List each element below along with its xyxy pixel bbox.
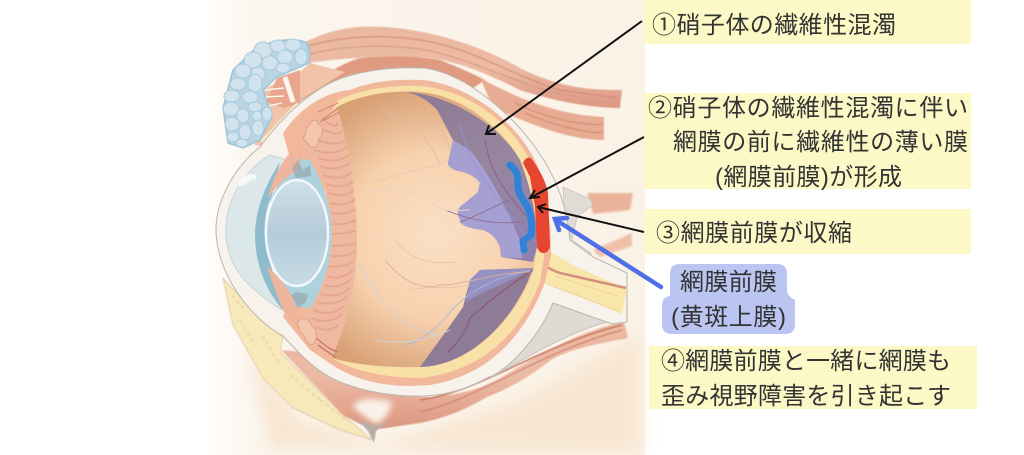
panel: step 1 bbox=[644, 0, 971, 44]
arrow: step 1 to vitreous bbox=[486, 21, 642, 134]
lacrimal gland tendon bbox=[262, 70, 300, 142]
optic nerve bbox=[527, 250, 627, 314]
text: step 2: 網膜の前に繊維性の薄い膜 bbox=[673, 129, 968, 156]
posterior chamber bbox=[270, 158, 332, 308]
retinal yellow layer bbox=[322, 86, 544, 378]
text: step 3: ③網膜前膜が収縮 bbox=[656, 220, 852, 247]
grey orbital fat pads bbox=[490, 303, 607, 378]
contraction red layer bbox=[523, 158, 550, 253]
vitreous opacity upper region bbox=[407, 92, 537, 262]
text: step 4: ④網膜前膜と一緒に網膜も bbox=[661, 348, 951, 375]
ciliary process lower bbox=[297, 319, 316, 345]
panel: step 4 bbox=[649, 346, 977, 410]
inferior eyelid muscle bbox=[281, 322, 628, 443]
posterior muscle stubs bbox=[587, 193, 633, 214]
label: epiretinal membrane bbox=[662, 264, 795, 334]
iris upper bbox=[268, 146, 311, 198]
cornea bbox=[226, 155, 288, 310]
anterior chamber bbox=[255, 162, 283, 310]
lower orbital fat bbox=[223, 278, 372, 440]
ora serrata stripes bbox=[318, 103, 340, 122]
retinal vessels bbox=[358, 110, 533, 352]
superior rectus muscle bbox=[298, 56, 604, 140]
text: step 2: (網膜前膜)が形成 bbox=[715, 164, 902, 191]
text: step 1: ①硝子体の繊維性混濁 bbox=[652, 12, 896, 39]
lacrimal gland bbox=[223, 39, 310, 148]
text: step 4 bbox=[661, 348, 951, 410]
panel: step 2 bbox=[644, 93, 971, 191]
epiretinal membrane blue bbox=[510, 165, 532, 250]
arrow: label to membrane bbox=[555, 218, 661, 287]
suspensory zone marks bbox=[291, 160, 311, 308]
vitreous opacity lower region bbox=[420, 268, 533, 367]
panel: step 3 bbox=[644, 209, 971, 254]
ciliary process upper bbox=[303, 120, 323, 148]
ciliary body bbox=[305, 107, 357, 358]
text: step 2: ②硝子体の繊維性混濁に伴い bbox=[648, 95, 968, 122]
arrow: step 2 to membrane bbox=[530, 137, 644, 198]
illustration background bbox=[208, 0, 645, 455]
lens bbox=[266, 180, 328, 286]
fundus bbox=[332, 92, 537, 367]
illustration: eye cross-section bbox=[208, 0, 645, 455]
upper eyelid muscle bbox=[303, 27, 622, 108]
label: epiretinal membrane: 網膜前膜 bbox=[680, 269, 777, 296]
choroid layer bbox=[283, 80, 551, 386]
corneal highlight bbox=[240, 175, 255, 185]
text: step 2 bbox=[648, 95, 968, 191]
arrow: step 3 to contraction bbox=[538, 204, 644, 232]
iris lower bbox=[267, 267, 306, 328]
orbital soft tissue shading bbox=[250, 335, 640, 450]
label: epiretinal membrane: (黄斑上膜) bbox=[671, 304, 786, 331]
soft tissue under lacrimal gland bbox=[255, 63, 345, 146]
sclera bbox=[216, 68, 627, 396]
text: step 4: 歪み視野障害を引き起こす bbox=[661, 383, 951, 410]
